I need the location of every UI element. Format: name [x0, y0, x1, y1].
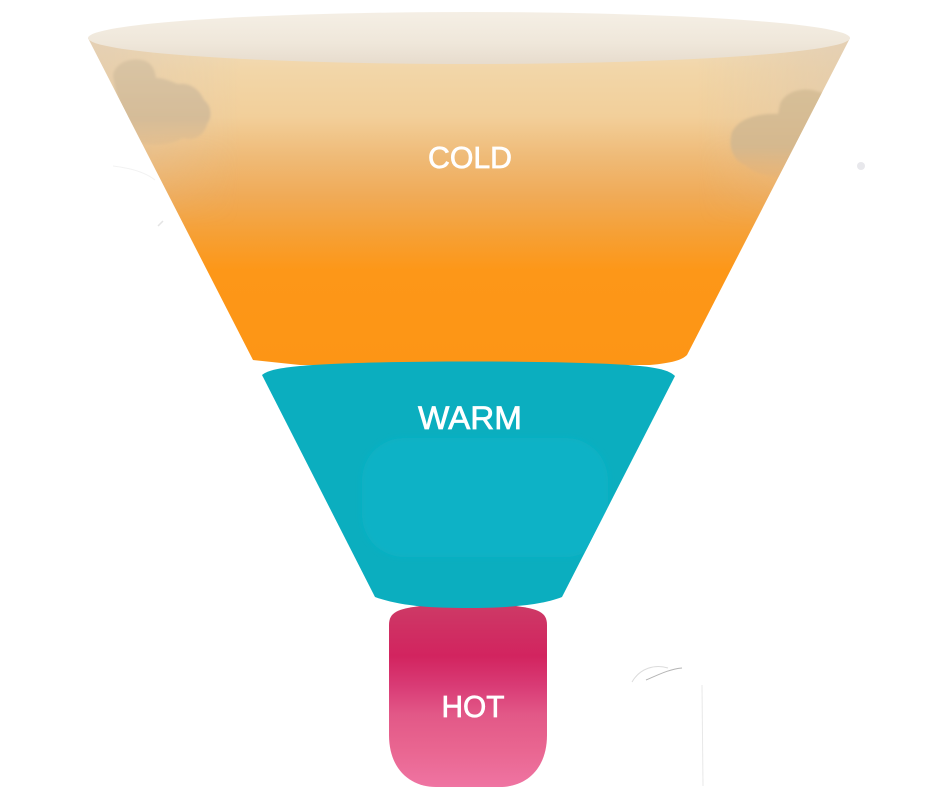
- icon: right cloud: [731, 90, 830, 178]
- panel: hot funnel section: [389, 604, 547, 787]
- label: hot: HOT: [442, 689, 505, 724]
- icon: left cloud: [113, 60, 210, 145]
- label: warm: WARM: [418, 400, 522, 436]
- highlight blob: [582, 502, 611, 556]
- funnel rim: [88, 12, 850, 64]
- speck: stray marks: [113, 162, 865, 786]
- label: cold: COLD: [428, 140, 512, 175]
- panel: warm funnel section: [262, 362, 675, 608]
- panel: cold funnel section: [88, 12, 850, 365]
